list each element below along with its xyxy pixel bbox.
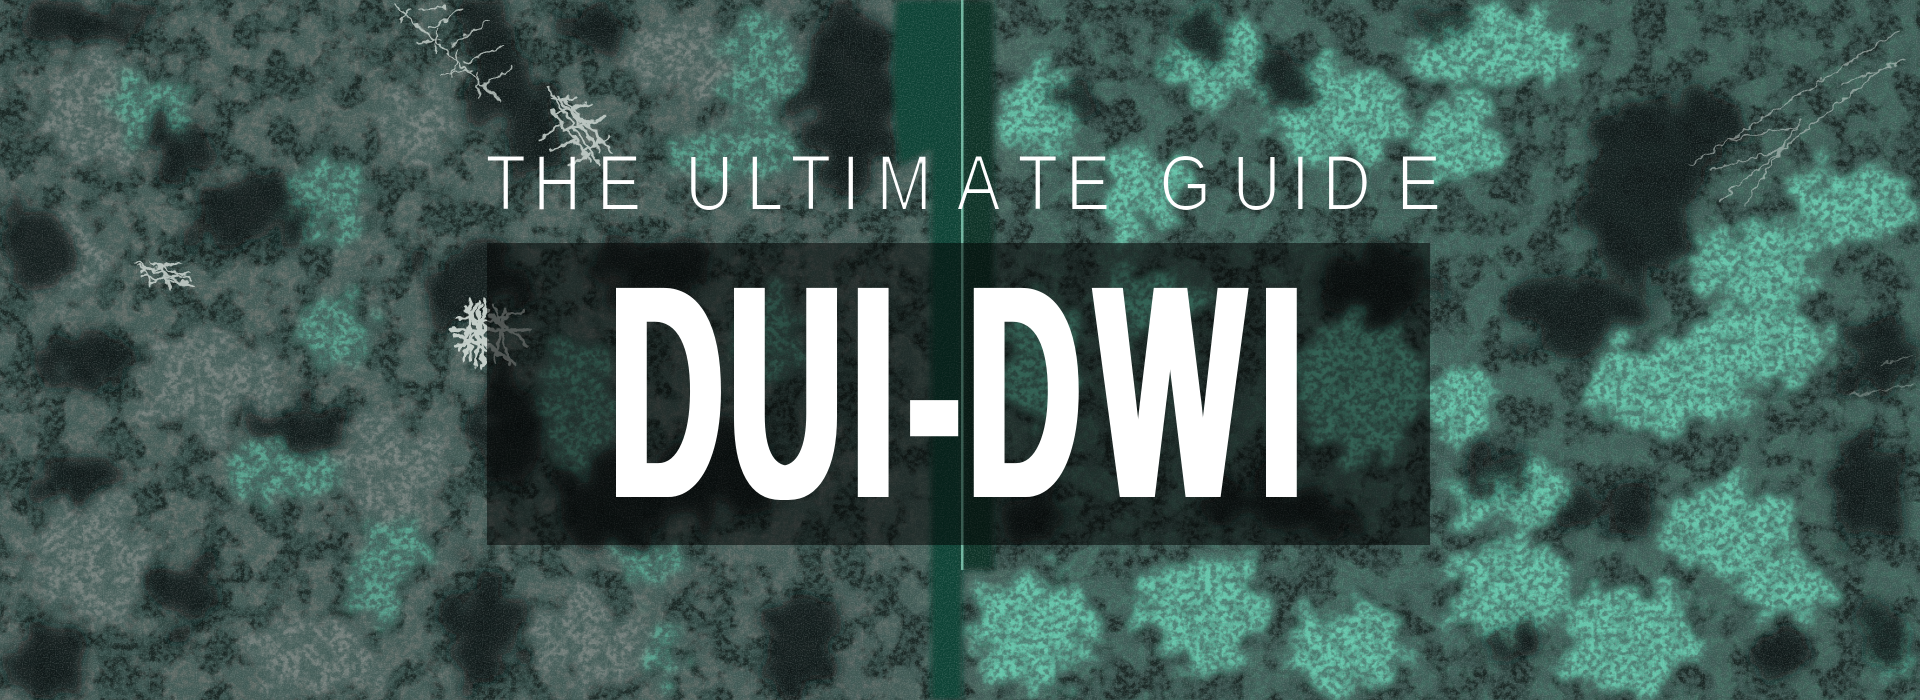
subtitle: THE ULTIMATE GUIDE: THE ULTIMATE GUIDE [485, 140, 1441, 227]
grey-green crowns, left [10, 20, 730, 695]
teal crowns, left [114, 15, 804, 680]
crown mottling, right [985, 0, 1920, 700]
dark translucent panel [487, 243, 1430, 545]
dead trees and bare branches [136, 5, 1915, 395]
heading: DUI-DWI: DUI-DWI [609, 223, 1303, 562]
road [893, 0, 994, 700]
bright teal crowns, right [969, 11, 1914, 698]
road centre line [961, 0, 964, 570]
